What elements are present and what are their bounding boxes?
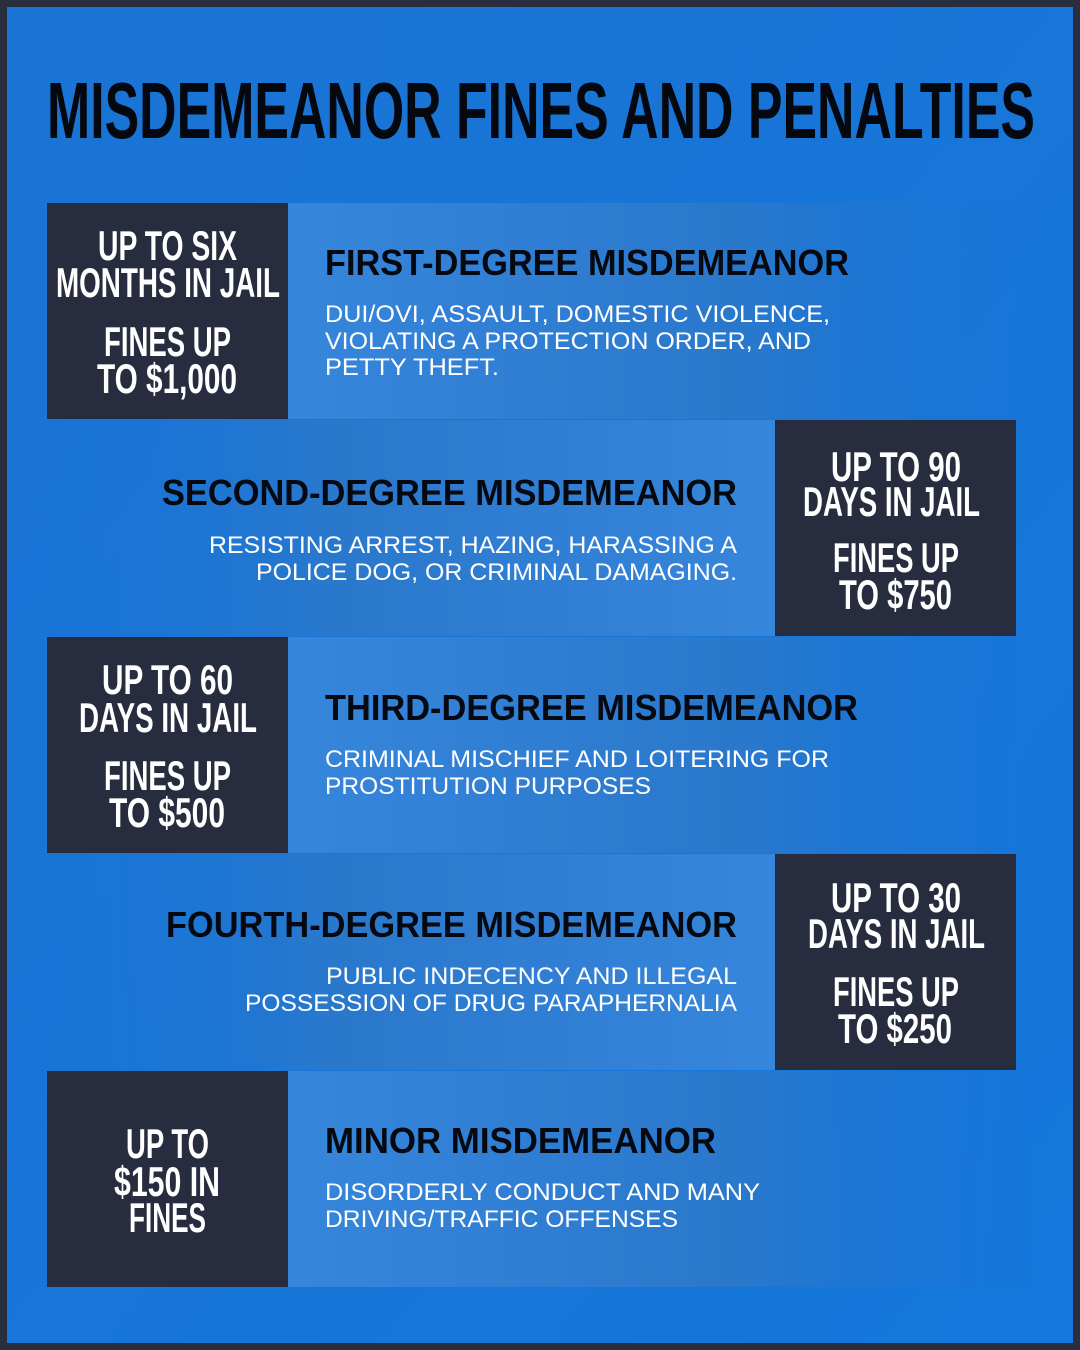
description 2: RESISTING ARREST, HAZING, HARASSING A — [209, 532, 737, 559]
row: minor — [47, 1071, 1033, 1287]
description 3: PROSTITUTION PURPOSES — [325, 773, 651, 800]
penalty box 3: UP TO 60 — [102, 656, 233, 703]
heading 3: THIRD-DEGREE MISDEMEANOR — [325, 687, 858, 728]
heading 5: MINOR MISDEMEANOR — [325, 1120, 716, 1161]
row: second-degree — [47, 420, 1016, 636]
description 3: CRIMINAL MISCHIEF AND LOITERING FOR — [325, 746, 829, 773]
penalty box 1 — [47, 203, 288, 419]
penalty box 4: FINES UP — [833, 968, 959, 1015]
penalty box 5 — [47, 1071, 288, 1287]
row: first-degree — [47, 203, 1033, 419]
penalty box 1: UP TO SIX — [98, 222, 237, 269]
penalty box 3: FINES UP — [104, 752, 231, 799]
row: third-degree — [47, 637, 1033, 853]
penalty box 3: DAYS IN JAIL — [79, 694, 257, 741]
penalty box 2: UP TO 90 — [831, 443, 961, 490]
heading 1: FIRST-DEGREE MISDEMEANOR — [325, 242, 849, 283]
description 2: POLICE DOG, OR CRIMINAL DAMAGING. — [256, 559, 737, 586]
penalty box 2: FINES UP — [833, 534, 959, 581]
penalty box 4 — [775, 854, 1016, 1070]
description 1: VIOLATING A PROTECTION ORDER, AND — [325, 328, 811, 355]
penalty box 1: FINES UP — [104, 318, 231, 365]
description 2 — [209, 532, 737, 586]
penalty box 3 — [47, 637, 288, 853]
penalty box 2: DAYS IN JAIL — [803, 478, 980, 525]
penalty box 5: FINES — [129, 1194, 206, 1241]
penalty box 1: MONTHS IN JAIL — [56, 259, 280, 306]
penalty box 1: TO $1,000 — [97, 355, 237, 402]
penalty box 4: DAYS IN JAIL — [808, 910, 985, 957]
description 4: POSSESSION OF DRUG PARAPHERNALIA — [245, 990, 737, 1017]
heading 4: FOURTH-DEGREE MISDEMEANOR — [166, 904, 737, 945]
penalty box 4: TO $250 — [838, 1005, 952, 1052]
description 3 — [325, 746, 829, 800]
penalty box 2 — [775, 420, 1016, 636]
description 5 — [325, 1179, 760, 1233]
penalty box 2: TO $750 — [839, 571, 952, 618]
description 5: DISORDERLY CONDUCT AND MANY — [325, 1179, 760, 1206]
penalty box 5: UP TO — [126, 1120, 209, 1167]
description 4 — [245, 963, 737, 1017]
description 1: PETTY THEFT. — [325, 354, 499, 381]
penalty box 3: TO $500 — [109, 789, 225, 836]
penalty box 5: $150 IN — [114, 1158, 220, 1205]
heading 2: SECOND-DEGREE MISDEMEANOR — [162, 472, 737, 513]
penalty box 4: UP TO 30 — [831, 874, 961, 921]
description 1 — [325, 301, 830, 381]
description 1: DUI/OVI, ASSAULT, DOMESTIC VIOLENCE, — [325, 301, 830, 328]
row: fourth-degree — [47, 854, 1016, 1070]
description 4: PUBLIC INDECENCY AND ILLEGAL — [326, 963, 737, 990]
description 5: DRIVING/TRAFFIC OFFENSES — [325, 1206, 678, 1233]
